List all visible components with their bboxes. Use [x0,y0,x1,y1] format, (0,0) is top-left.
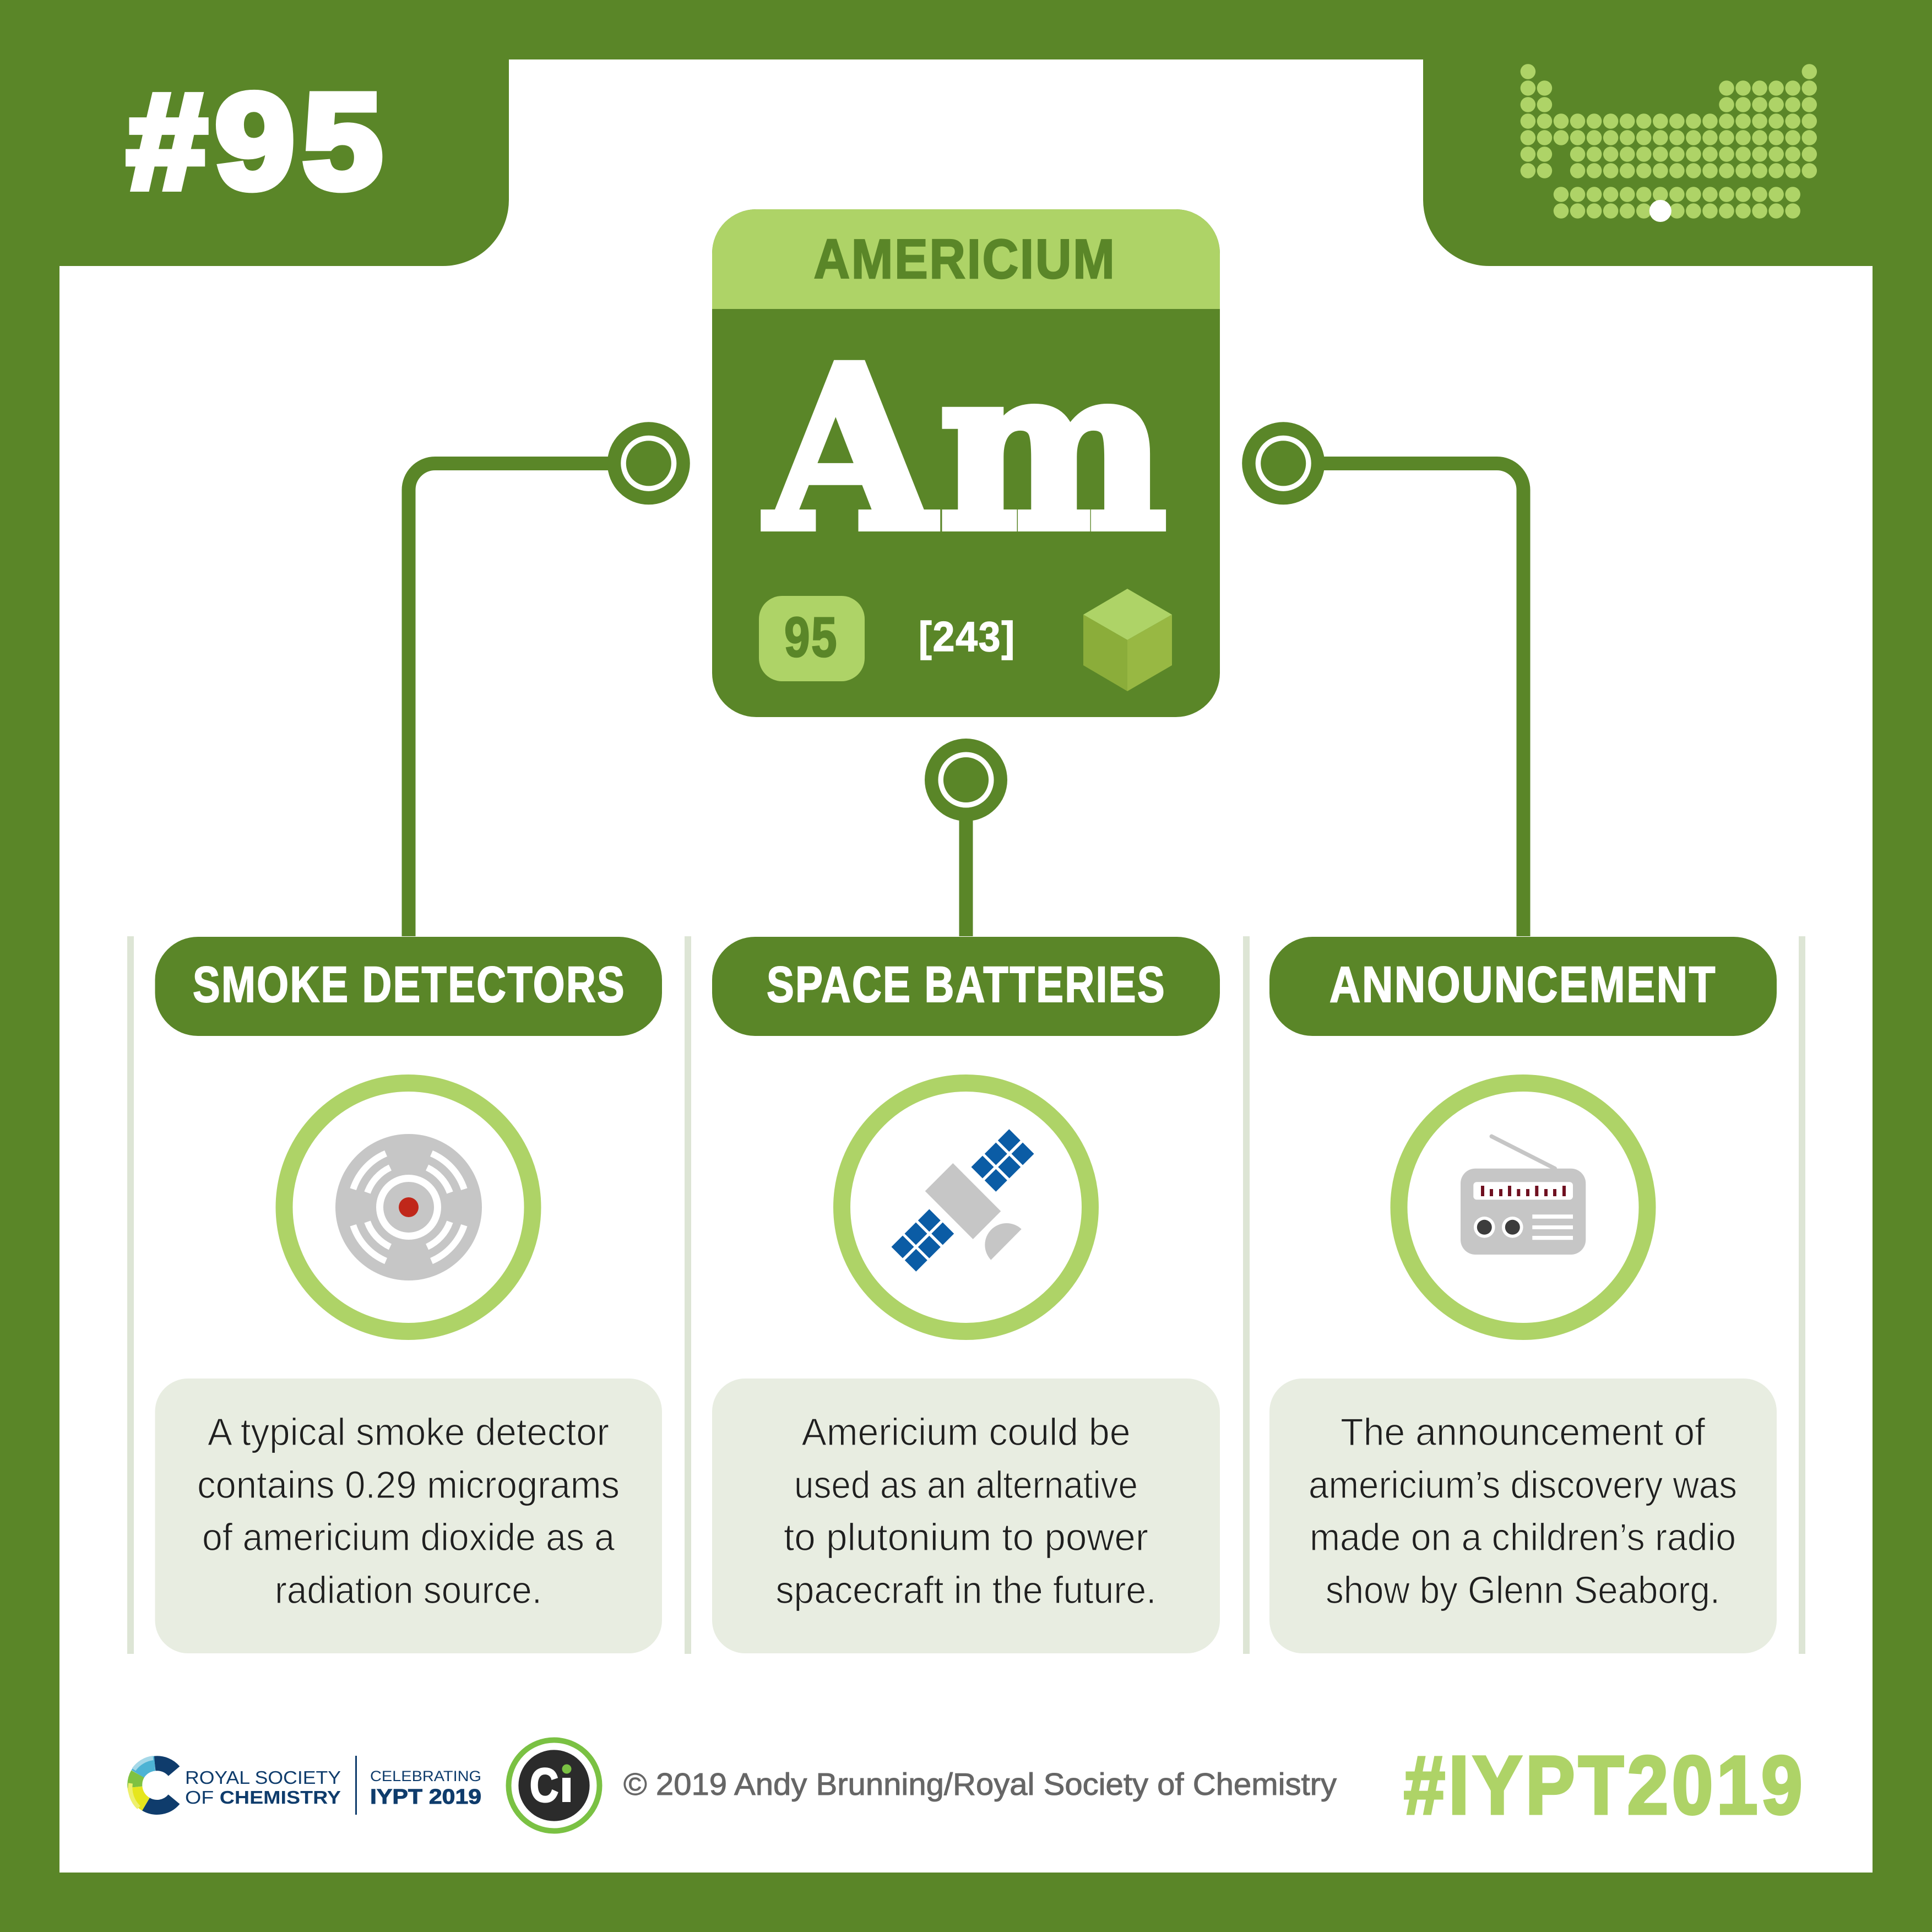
logo: Royal Society of Chemistry: OF CHEMISTRY [185,1787,341,1808]
description box: americium’s discovery was [1309,1463,1737,1506]
logo: Royal Society of Chemistry: CELEBRATING [370,1768,481,1784]
description box: contains 0.29 micrograms [197,1463,620,1506]
atomic number badge: 95 [784,606,838,669]
connector: centre to space batteries [925,739,1007,936]
element name: AMERICIUM [814,229,1116,290]
card header band [712,209,1220,309]
title: element number: #95 [127,66,390,216]
description box: show by Glenn Seaborg. [1326,1569,1720,1611]
description box: spacecraft in the future. [775,1569,1157,1611]
heading pill [712,937,1220,1036]
logo ring [130,1758,174,1808]
panel: announcement [1269,937,1777,1653]
connector: left to smoke detectors [409,422,690,936]
heading pill [155,937,662,1036]
atomic mass: [243] [919,614,1016,660]
panel: smoke detectors [155,937,662,1653]
description box: A typical smoke detector [208,1410,609,1453]
element symbol: Am [763,318,1172,580]
description box: radiation source. [275,1569,542,1611]
panel: element card [712,209,1220,717]
connector: right to announcement [1242,422,1523,936]
description box [1269,1379,1777,1653]
description box: The announcement of [1341,1410,1706,1453]
icon: crystal cube [1083,589,1172,691]
heading pill: ANNOUNCEMENT [1329,957,1717,1013]
panel: space batteries [712,937,1220,1653]
logo wordmark: ROYAL SOCIETY [185,1767,341,1788]
heading pill: SPACE BATTERIES [767,957,1166,1013]
icon: satellite [842,1083,1090,1332]
description box [712,1379,1220,1653]
icon: radio [1399,1083,1647,1332]
logo: Royal Society of Chemistry [130,1756,481,1815]
dividers [127,936,1805,1654]
description box: made on a children’s radio [1310,1516,1736,1559]
description box: of americium dioxide as a [202,1516,615,1559]
logo: Compound Interest: C [530,1759,558,1812]
description box [155,1379,662,1653]
description box: Americium could be [802,1410,1130,1453]
logo: Royal Society of Chemistry: IYPT 2019 [370,1786,481,1809]
icon: smoke detector [284,1083,533,1332]
description box: used as an alternative [794,1463,1138,1506]
copyright: © 2019 Andy Brunning/Royal Society of Chemistry [623,1767,1337,1802]
atomic number badge [759,596,865,681]
heading pill: SMOKE DETECTORS [193,957,626,1013]
hashtag: #IYPT2019 [1404,1739,1806,1831]
icon: periodic table locator [1528,72,1810,222]
logo: Compound Interest [509,1740,599,1831]
heading pill [1269,937,1777,1036]
description box: to plutonium to power [784,1516,1148,1559]
